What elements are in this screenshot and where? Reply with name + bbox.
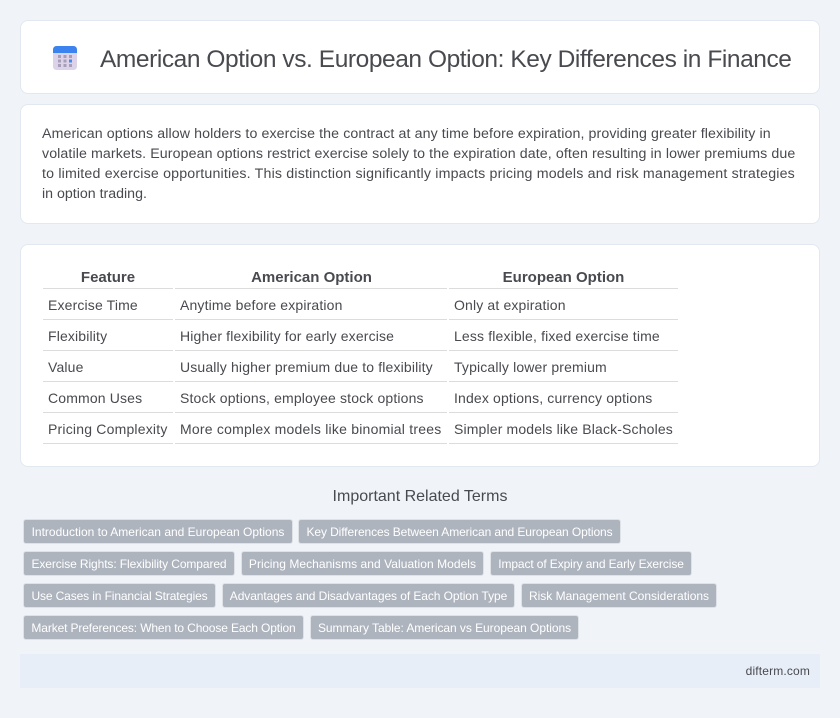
related term chips: Introduction to American and European Options bbox=[32, 525, 284, 539]
comparison table: More complex models like binomial trees bbox=[180, 421, 441, 437]
comparison table: European Option bbox=[503, 269, 624, 286]
footer bar bbox=[20, 654, 820, 688]
comparison table: Usually higher premium due to flexibility bbox=[180, 359, 433, 375]
intro card bbox=[20, 104, 820, 224]
comparison table: American Option bbox=[251, 269, 372, 286]
related term chips bbox=[23, 519, 717, 640]
intro paragraph bbox=[42, 126, 795, 202]
comparison table: Flexibility bbox=[48, 328, 107, 344]
table card bbox=[20, 244, 820, 467]
header card bbox=[20, 20, 820, 94]
related term chips: Summary Table: American vs European Options bbox=[318, 621, 571, 635]
related term chips: Risk Management Considerations bbox=[529, 589, 709, 603]
comparison table: Less flexible, fixed exercise time bbox=[454, 328, 660, 344]
related term chips: Use Cases in Financial Strategies bbox=[31, 589, 208, 603]
title: American Option vs. European Option: Key Differences in Finance bbox=[100, 46, 792, 73]
comparison table: Index options, currency options bbox=[454, 390, 652, 406]
comparison table: Pricing Complexity bbox=[48, 421, 168, 437]
related term chips: Exercise Rights: Flexibility Compared bbox=[31, 557, 227, 571]
related term chips: Pricing Mechanisms and Valuation Models bbox=[249, 557, 476, 571]
intro paragraph: in option trading. bbox=[42, 186, 147, 202]
comparison table: Exercise Time bbox=[48, 297, 138, 313]
comparison table: Simpler models like Black-Scholes bbox=[454, 421, 673, 437]
comparison table: Common Uses bbox=[48, 390, 142, 406]
related terms heading: Important Related Terms bbox=[333, 488, 507, 505]
comparison table: Feature bbox=[81, 269, 135, 286]
comparison table: Anytime before expiration bbox=[180, 297, 343, 313]
comparison table: Stock options, employee stock options bbox=[180, 390, 424, 406]
intro paragraph: to limited exercise opportunities. This distinction significantly impacts pricing models and risk management strategies bbox=[42, 166, 795, 182]
footer credit: difterm.com bbox=[746, 664, 810, 678]
related term chips: Key Differences Between American and European Options bbox=[306, 525, 612, 539]
related term chips: Advantages and Disadvantages of Each Option Type bbox=[230, 589, 507, 603]
comparison table: Only at expiration bbox=[454, 297, 566, 313]
related term chips: Impact of Expiry and Early Exercise bbox=[498, 557, 684, 571]
comparison table: Value bbox=[48, 359, 84, 375]
intro paragraph: American options allow holders to exercise the contract at any time before expiration, providing greater flexibility in bbox=[42, 126, 771, 142]
intro paragraph: volatile markets. European options restrict exercise solely to the expiration date, often resulting in lower premiums due bbox=[42, 146, 795, 162]
comparison table bbox=[43, 269, 678, 444]
icon: calendar bbox=[53, 46, 77, 70]
related term chips: Market Preferences: When to Choose Each Option bbox=[31, 621, 296, 635]
comparison table: Higher flexibility for early exercise bbox=[180, 328, 394, 344]
comparison table: Typically lower premium bbox=[454, 359, 607, 375]
